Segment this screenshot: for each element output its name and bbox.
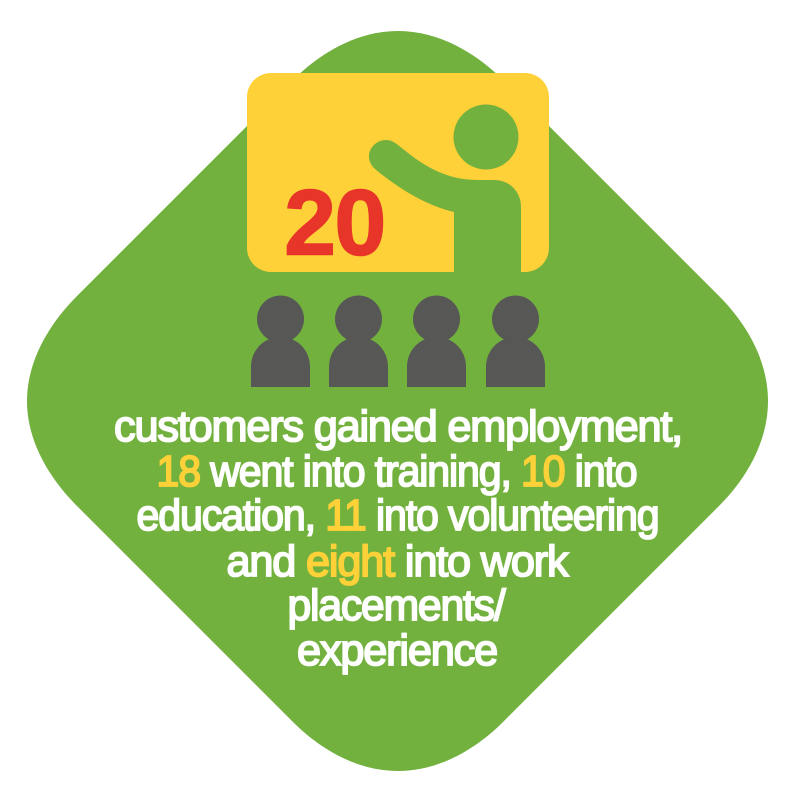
icon: person 2 [329, 296, 388, 387]
icon: audience [251, 296, 545, 387]
panel: yellow presentation board [247, 73, 549, 272]
text block: description: and eight into work [226, 537, 570, 586]
text block: description [114, 402, 682, 675]
icon: person 1 [251, 296, 310, 387]
text block: description: experience [297, 626, 497, 675]
icon: person 4 [486, 296, 545, 387]
text block: description: 18 went into training, 10 into [156, 447, 636, 496]
text block: description: customers gained employment, [114, 402, 682, 451]
text block: description: education, 11 into volunteering [136, 491, 658, 540]
text block: description: placements/ [288, 581, 506, 630]
icon: person 3 [407, 296, 466, 387]
icon: presenter [369, 104, 521, 272]
number: 20: 20 [284, 170, 385, 274]
